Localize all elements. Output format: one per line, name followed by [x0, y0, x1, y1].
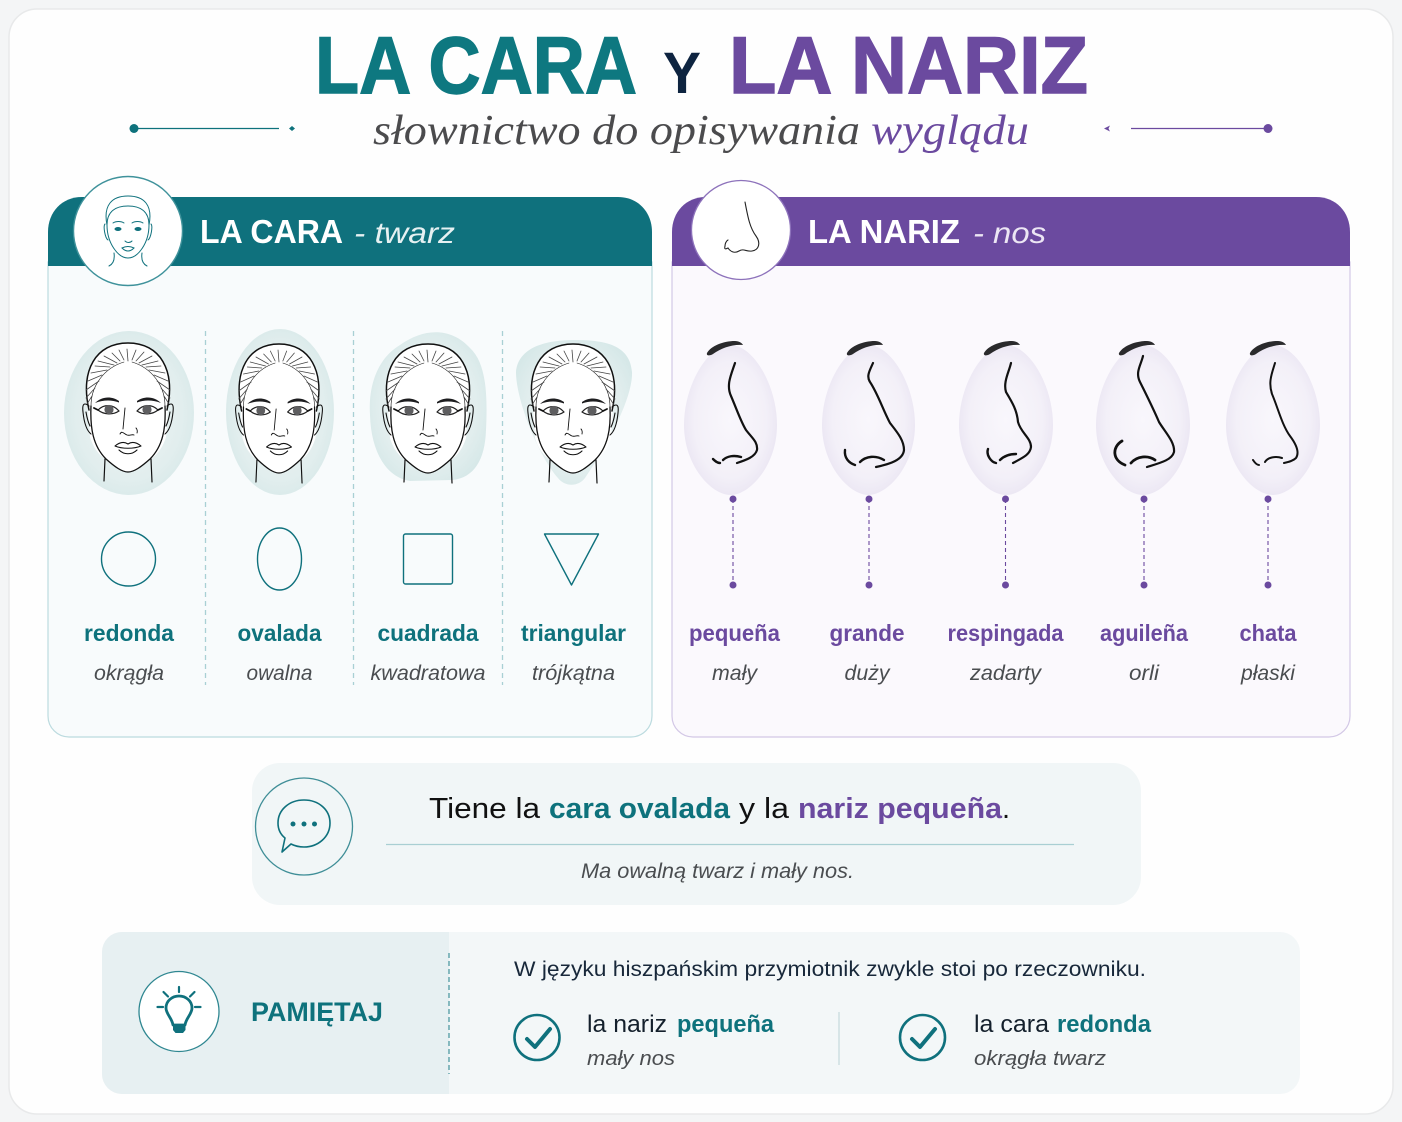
nose: respingada: [959, 341, 1053, 495]
connector: chata: [1264, 496, 1272, 588]
label: pequeña: [689, 620, 780, 685]
panel: la nariz: [672, 180, 1350, 737]
example sentence: cara ovalada: [549, 793, 731, 825]
face: ovalada: [226, 329, 334, 495]
label: respingada: respingada: [948, 620, 1064, 646]
panel: example sentence: [252, 763, 1141, 905]
panel header: [48, 197, 652, 266]
label: cuadrada: kwadratowa: [370, 662, 486, 685]
example: la nariz pequeña: mały nos: [587, 1048, 675, 1070]
face: triangular: [516, 340, 632, 485]
right title ornament: [1104, 124, 1272, 133]
panel: la cara: [48, 176, 652, 737]
panel: pamiętaj: [102, 932, 1300, 1094]
title: LA CARA: [315, 21, 637, 111]
example: la nariz pequeña: la nariz: [587, 1011, 667, 1038]
example: la cara redonda: okrągła twarz: [974, 1048, 1106, 1070]
shape: circle: [102, 532, 156, 586]
label: ovalada: [238, 620, 322, 685]
example sentence: .: [1002, 793, 1010, 825]
label: pequeña: pequeña: [689, 620, 780, 646]
label: cuadrada: cuadrada: [378, 620, 479, 646]
face: redonda: [64, 331, 194, 495]
label: triangular: [521, 620, 626, 685]
label: aguileña: orli: [1129, 662, 1160, 685]
pamiętaj heading: PAMIĘTAJ: [251, 997, 383, 1027]
panel heading: [200, 213, 455, 250]
label: redonda: redonda: [84, 620, 174, 646]
connector: pequeña: [730, 496, 736, 588]
label: grande: duży: [844, 662, 891, 685]
face: cuadrada: [370, 332, 487, 483]
icon: nose in circle: [692, 180, 790, 280]
label: pequeña: mały: [712, 662, 759, 685]
left title ornament: [130, 124, 295, 133]
title: LA NARIZ: [729, 21, 1088, 111]
shape: triangle: [544, 534, 598, 585]
title: Y: [663, 41, 701, 106]
icon: speech bubble: [256, 778, 352, 875]
example translation: Ma owalną twarz i mały nos.: [581, 860, 854, 883]
connector: grande: [866, 496, 872, 588]
label: aguileña: aguileña: [1100, 620, 1188, 646]
label: triangular: triangular: [521, 620, 626, 646]
panel heading: LA NARIZ: [808, 213, 960, 250]
panel heading: [808, 213, 1046, 250]
label: grande: grande: [830, 620, 904, 646]
nose: grande: [822, 341, 915, 495]
label: respingada: [948, 620, 1064, 685]
icon: light bulb: [139, 972, 219, 1052]
label: triangular: trójkątna: [532, 662, 615, 685]
shape: square: [404, 534, 452, 584]
label: ovalada: owalna: [246, 662, 312, 685]
example sentence: nariz pequeña: [798, 793, 1003, 825]
shape: oval: [258, 528, 302, 590]
nose: aguileña: [1096, 341, 1190, 495]
nose: chata: [1226, 341, 1320, 495]
example: la nariz pequeña: [514, 1011, 775, 1070]
label: chata: [1240, 620, 1297, 685]
label: chata: chata: [1240, 620, 1297, 646]
example: la cara redonda: [900, 1011, 1152, 1070]
panel header: [672, 197, 1350, 266]
label: respingada: zadarty: [969, 662, 1043, 685]
panel body: [672, 262, 1350, 737]
label: grande: [830, 620, 904, 685]
example sentence: y la: [739, 793, 790, 825]
connector: respingada: [1002, 496, 1009, 588]
subtitle: wyglądu: [871, 108, 1029, 154]
title: [315, 21, 1088, 111]
panel heading: - nos: [973, 217, 1046, 250]
panel body: [48, 262, 652, 737]
panel heading: - twarz: [354, 217, 455, 250]
subtitle: [373, 108, 1029, 154]
example: la nariz pequeña: pequeña: [677, 1011, 775, 1038]
example sentence: Tiene la: [429, 793, 541, 825]
label: cuadrada: [370, 620, 486, 685]
icon: face in circle: [74, 176, 182, 286]
example: la cara redonda: redonda: [1057, 1011, 1152, 1038]
label: redonda: okrągła: [94, 662, 164, 685]
label: ovalada: ovalada: [238, 620, 322, 646]
example: la cara redonda: la cara: [974, 1011, 1050, 1038]
label: chata: płaski: [1240, 662, 1296, 685]
nose: pequeña: [684, 341, 777, 495]
connector: aguileña: [1140, 496, 1148, 588]
label: redonda: [84, 620, 174, 685]
rule text: W języku hiszpańskim przymiotnik zwykle stoi po rzeczowniku.: [514, 957, 1146, 981]
panel heading: LA CARA: [200, 213, 343, 250]
face column dividers: [206, 331, 502, 685]
subtitle: słownictwo do opisywania: [373, 108, 860, 154]
label: aguileña: [1100, 620, 1188, 685]
